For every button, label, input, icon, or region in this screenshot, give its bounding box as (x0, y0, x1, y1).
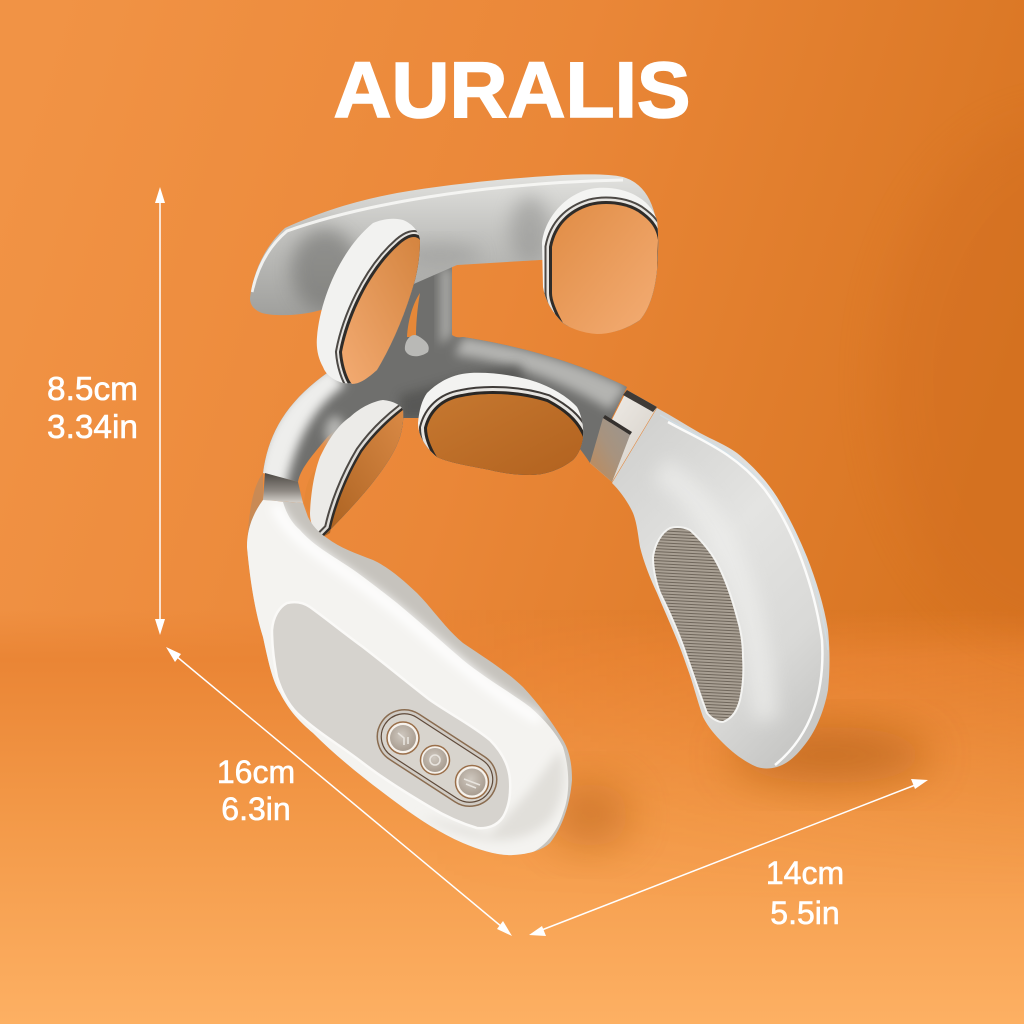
height label (47, 370, 138, 445)
button cluster (367, 699, 507, 817)
button 1 (387, 722, 419, 754)
pad: top left (317, 219, 420, 384)
gap behind lower left pad (304, 465, 322, 512)
neck arc and stem (255, 264, 627, 490)
stem bump (405, 335, 429, 356)
left wing edge (247, 473, 263, 547)
width label: 5.5in (770, 895, 840, 931)
height label: 3.34in (47, 408, 138, 445)
length label: 16cm (217, 754, 295, 790)
right body (612, 408, 830, 768)
pad: middle (418, 373, 583, 475)
button 2 (420, 746, 450, 774)
left band (263, 473, 303, 503)
top bar (250, 174, 655, 315)
width label (766, 855, 844, 931)
right band (590, 390, 657, 482)
button 3 (456, 766, 488, 798)
floor shadows (550, 727, 930, 847)
control panel (272, 602, 510, 828)
height label: 8.5cm (47, 370, 138, 407)
left body (240, 495, 572, 860)
white face (240, 495, 568, 860)
speaker grille (653, 527, 743, 722)
dimension: width arrow (529, 779, 928, 936)
length label (217, 754, 295, 827)
product: neckband massager (240, 174, 830, 860)
dimension: height arrow (155, 187, 165, 635)
title: AURALIS (334, 45, 690, 134)
neck bump (325, 416, 345, 448)
dimension: length arrow (166, 647, 512, 936)
width label: 14cm (766, 855, 844, 891)
pad: top right (542, 188, 658, 334)
pad: lower left (310, 400, 403, 537)
length label: 6.3in (221, 791, 291, 827)
hole in stem (407, 293, 420, 337)
